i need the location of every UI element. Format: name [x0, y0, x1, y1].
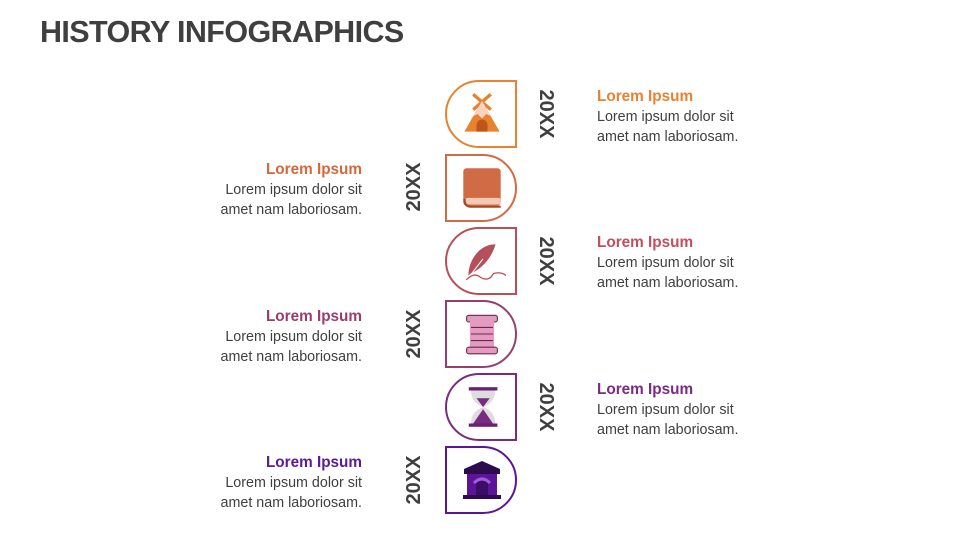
text 3: Lorem Ipsum — [597, 234, 693, 251]
text 5: amet nam laboriosam. — [597, 422, 738, 438]
year 1: 20XX — [535, 90, 557, 138]
text 2: Lorem Ipsum — [266, 161, 362, 178]
text 4: Lorem Ipsum — [266, 308, 362, 325]
box 3: quill — [445, 227, 517, 295]
text 6: Lorem ipsum dolor sit — [225, 475, 362, 491]
text 4: Lorem ipsum dolor sit — [225, 329, 362, 345]
text 3: Lorem ipsum dolor sit — [597, 255, 734, 271]
box 1: tent — [445, 80, 517, 148]
year 3: 20XX — [535, 237, 557, 285]
text 6: Lorem Ipsum — [266, 454, 362, 471]
text 4 — [221, 308, 362, 365]
year 5: 20XX — [535, 383, 557, 431]
box 2: book — [445, 154, 517, 222]
text 1: Lorem Ipsum — [597, 88, 693, 105]
box 5: hourglass — [445, 373, 517, 441]
text 2: amet nam laboriosam. — [221, 202, 362, 218]
text 5 — [597, 381, 738, 438]
year 2: 20XX — [403, 163, 425, 211]
text 2: Lorem ipsum dolor sit — [225, 182, 362, 198]
box 4: scroll — [445, 300, 517, 368]
title: HISTORY INFOGRAPHICS — [40, 15, 404, 49]
box 6: museum — [445, 446, 517, 514]
text 3: amet nam laboriosam. — [597, 275, 738, 291]
text 4: amet nam laboriosam. — [221, 349, 362, 365]
year 6: 20XX — [403, 456, 425, 504]
text 6 — [221, 454, 362, 511]
text 5: Lorem ipsum dolor sit — [597, 402, 734, 418]
text 1: Lorem ipsum dolor sit — [597, 109, 734, 125]
text 2 — [221, 161, 362, 218]
text 1: amet nam laboriosam. — [597, 129, 738, 145]
text 5: Lorem Ipsum — [597, 381, 693, 398]
year 4: 20XX — [403, 310, 425, 358]
text 3 — [597, 234, 738, 291]
text 1 — [597, 88, 738, 145]
text 6: amet nam laboriosam. — [221, 495, 362, 511]
